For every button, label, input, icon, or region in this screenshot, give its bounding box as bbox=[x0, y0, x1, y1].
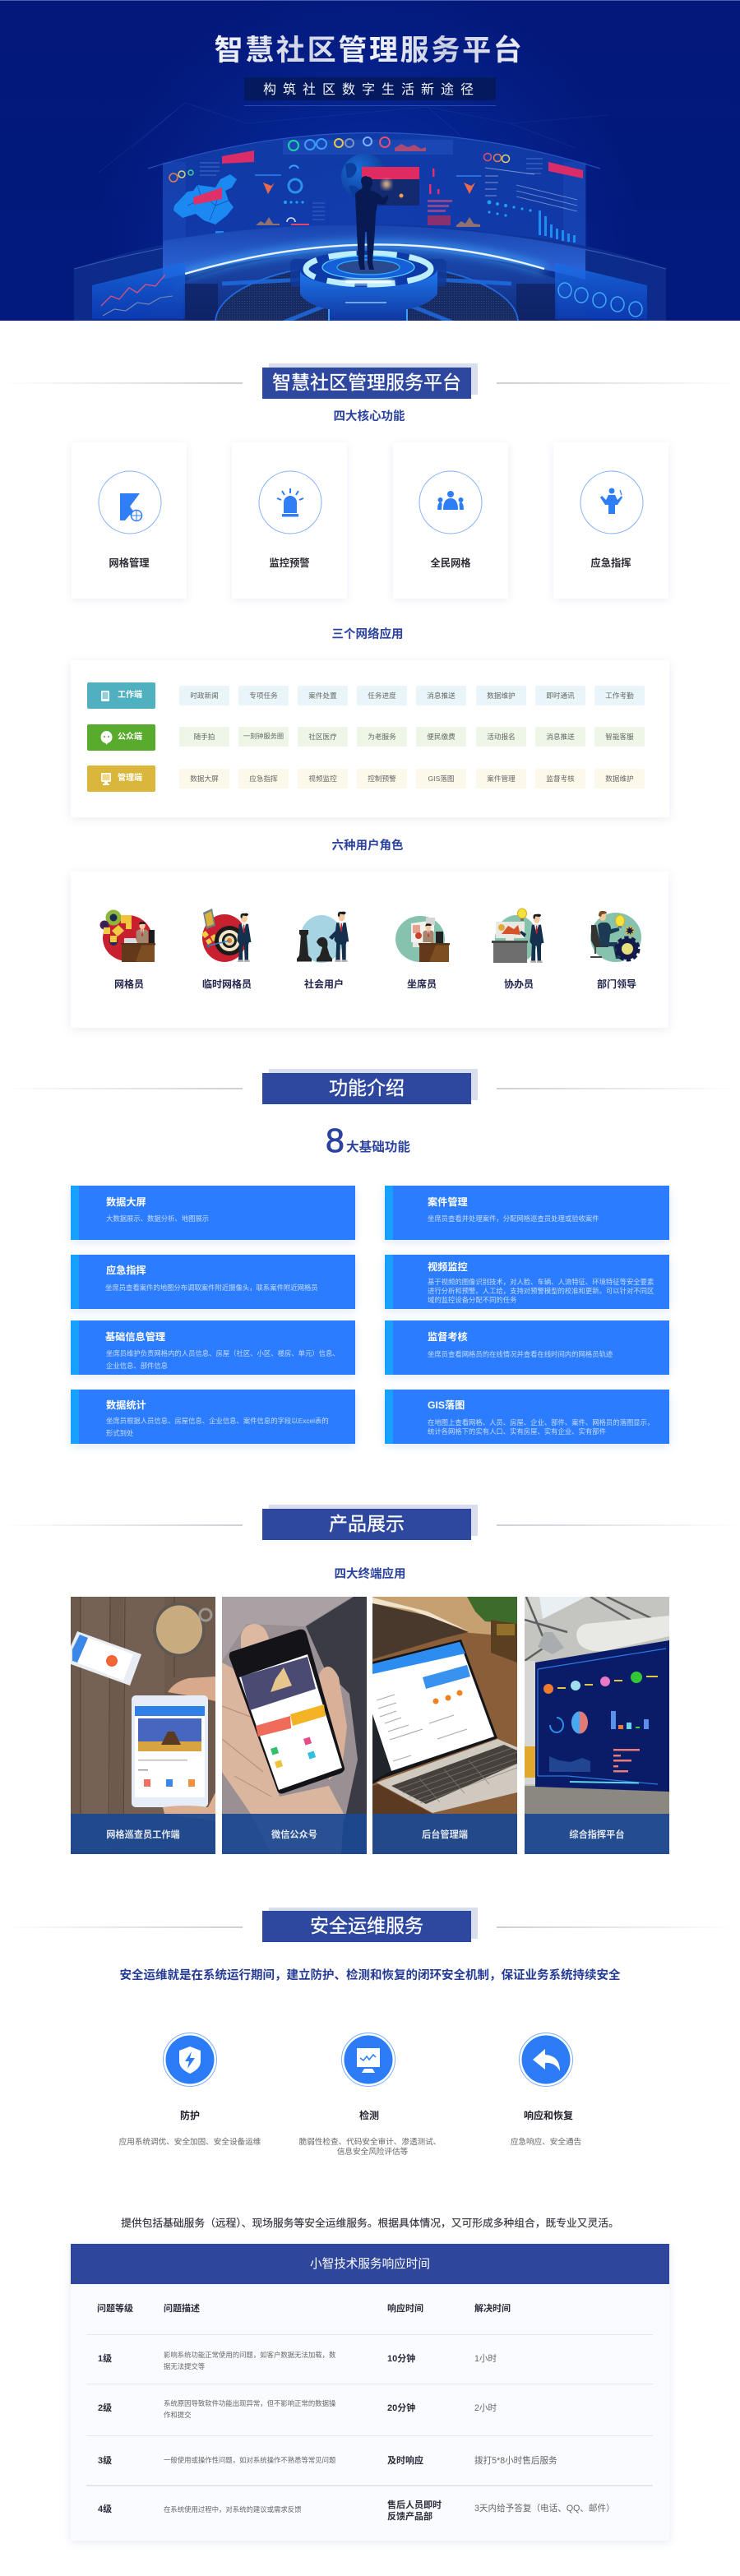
tags: 公众端 functions: 随手拍 bbox=[194, 733, 215, 741]
card: 全民网格 bbox=[393, 442, 508, 599]
table row: 2级: 20分钟 bbox=[387, 2403, 415, 2413]
role labels: 临时网格员 bbox=[202, 978, 252, 990]
table header bbox=[71, 2244, 669, 2284]
label: 防护: 防护 bbox=[180, 2110, 200, 2121]
tags: 公众端 functions: 便民缴费 bbox=[427, 733, 456, 741]
tags: 管理端 functions bbox=[179, 769, 645, 789]
heading shadow block: products bbox=[269, 1505, 478, 1536]
table row: 3级: 3级 bbox=[98, 2456, 112, 2466]
subheading: 四大核心功能: 四大核心功能 bbox=[334, 410, 405, 423]
hero banner bbox=[0, 0, 740, 321]
table row: 1级: 影响系统功能正常使用的问题，如客户数据无法加载，数 bbox=[164, 2351, 335, 2359]
label: 监控预警 bbox=[269, 557, 310, 569]
table row: 4级: 售后人员即时 bbox=[387, 2500, 442, 2510]
big number heading: 8大基础功能: 8 bbox=[326, 1122, 345, 1159]
pink alert tags bbox=[222, 150, 583, 178]
table row: 1级: 1级 bbox=[98, 2354, 112, 2364]
feature card: 数据统计 bbox=[71, 1390, 355, 1444]
description: 进行分析和预警。人工给，支持对预警模型的校准和更新。可以针对不同区 bbox=[428, 1287, 654, 1295]
section title: 产品展示 bbox=[262, 1509, 471, 1540]
title: 应急指挥 bbox=[106, 1265, 146, 1276]
tags: 公众端 functions: 消息推送 bbox=[546, 733, 575, 741]
tags: 工作端 functions: 数据维护 bbox=[487, 691, 516, 700]
heading shadow block: platform bbox=[269, 363, 478, 395]
table header: 小智技术服务响应时间 bbox=[310, 2258, 430, 2271]
title: 案件管理 bbox=[428, 1196, 468, 1208]
tags: 管理端 functions: 案件管理 bbox=[487, 775, 516, 783]
row label: 管理端 bbox=[87, 765, 155, 792]
section heading line right: products bbox=[497, 1524, 740, 1526]
product image: 后台管理端 bbox=[372, 1597, 517, 1854]
tags: 工作端 functions: 时政新闻 bbox=[190, 691, 219, 700]
label: 检测: 检测 bbox=[359, 2110, 379, 2121]
section heading line left: features bbox=[0, 1088, 243, 1089]
row label: 工作端 bbox=[87, 682, 155, 709]
right charts bbox=[428, 168, 577, 243]
feature card: 案件管理 bbox=[385, 1186, 669, 1240]
tags: 工作端 functions: 即时通讯 bbox=[546, 691, 575, 700]
section title: 智慧社区管理服务平台: 智慧社区管理服务平台 bbox=[272, 372, 461, 393]
section heading line right: features bbox=[497, 1088, 740, 1089]
description: 大数据展示、数据分析、地图展示 bbox=[106, 1214, 209, 1223]
section title: 安全运维服务 bbox=[262, 1911, 471, 1942]
description: 坐席员查看案件的地图分布调取案件附近摄像头，联系案件附近网格员 bbox=[105, 1283, 318, 1292]
icon: commander bbox=[580, 470, 643, 534]
feature card: GIS落图 bbox=[385, 1390, 669, 1444]
card: 网格管理 bbox=[72, 442, 187, 599]
mini gauges and text lines bbox=[169, 153, 543, 182]
tags: 公众端 functions: 智能客服 bbox=[605, 733, 634, 741]
label: 网格管理 bbox=[109, 557, 150, 569]
description: 统计各网格下的实有人口、实有房屋、实有企业、实有部件 bbox=[428, 1427, 606, 1436]
table row: 1级 bbox=[98, 2351, 497, 2370]
description: 检测: 脆弱性检查、代码安全审计、渗透测试、 bbox=[299, 2138, 441, 2147]
table panel: response time bbox=[71, 2244, 669, 2541]
table row: 4级: 3天内给予答复（电话、QQ、邮件） bbox=[474, 2504, 615, 2514]
intro statement: 安全运维就是在系统运行期间，建立防护、检测和恢复的闭环安全机制，保证业务系统持续安全 bbox=[120, 1969, 620, 1982]
subheading: 三个网络应用: 三个网络应用 bbox=[332, 628, 403, 641]
feature card: 监督考核 bbox=[385, 1320, 669, 1375]
label: 应急指挥 bbox=[590, 557, 631, 569]
title: 数据大屏 bbox=[106, 1196, 146, 1208]
row label: 管理端: 管理端 bbox=[118, 774, 142, 783]
product image: 网格巡查员工作端 bbox=[71, 1597, 215, 1854]
table row: 2级: 作和提交 bbox=[164, 2411, 191, 2419]
section title: 智慧社区管理服务平台 bbox=[262, 368, 471, 399]
tags: 公众端 functions: 一刻钟服务圈 bbox=[243, 733, 284, 740]
feature card: 数据大屏 bbox=[71, 1186, 355, 1240]
description: 坐席员维护负责网格内的人员信息、房屋（社区、小区、楼房、单元）信息、 bbox=[106, 1349, 340, 1357]
top gauges strip bbox=[283, 137, 453, 155]
subheading: 六种用户角色: 六种用户角色 bbox=[332, 839, 403, 853]
service statement: 提供包括基础服务（远程）、现场服务等安全运维服务。根据具体情况，又可形成多种组合，既专业又灵活。 bbox=[121, 2217, 619, 2229]
tags: 工作端 functions: 专项任务 bbox=[249, 691, 278, 700]
tags: 公众端 functions: 活动报名 bbox=[487, 733, 516, 741]
heading shadow block: security bbox=[269, 1908, 478, 1939]
table row: 2级: 系统原因导致软件功能出现异常，但不影响正常的数据操 bbox=[164, 2399, 335, 2407]
panel: six user roles bbox=[71, 872, 668, 1028]
description line 2: 检测: 信息安全风险评估等 bbox=[337, 2148, 408, 2157]
role illustration: 坐席员 bbox=[395, 916, 450, 962]
table row: 3级: 一般使用或操作性问题，如对系统操作不熟悉等常见问题 bbox=[164, 2456, 335, 2464]
bottom side panels bbox=[92, 262, 647, 319]
card: 应急指挥 bbox=[553, 442, 668, 599]
tags: 管理端 functions: GIS落图 bbox=[428, 775, 454, 783]
section title: 功能介绍: 功能介绍 bbox=[329, 1077, 405, 1098]
title: 数据统计 bbox=[106, 1399, 146, 1411]
role labels: 网格员 bbox=[114, 978, 144, 990]
title: 视频监控 bbox=[428, 1261, 468, 1273]
tags: 公众端 functions bbox=[179, 727, 645, 747]
title: 监督考核 bbox=[428, 1331, 468, 1343]
description: 基于视频的图像识别技术，对人脸、车辆、人流特征、环境特征等安全要素 bbox=[428, 1278, 654, 1286]
table row: 3级: 及时响应 bbox=[387, 2456, 423, 2466]
icon: people group bbox=[419, 470, 482, 534]
subheading: 四大终端应用: 四大终端应用 bbox=[334, 1568, 406, 1581]
title: 基础信息管理 bbox=[105, 1331, 165, 1343]
tags: 工作端 functions bbox=[179, 686, 645, 705]
tags: 管理端 functions: 数据大屏 bbox=[190, 775, 219, 783]
caption bbox=[525, 1814, 669, 1854]
description bbox=[106, 1417, 329, 1437]
panel: three network applications bbox=[71, 660, 669, 817]
description: 坐席员查看并处理案件，分配网格巡查员处理或验收案件 bbox=[428, 1214, 599, 1223]
table row: 2级: 2小时 bbox=[474, 2403, 497, 2413]
table row: 1级: 1小时 bbox=[474, 2354, 497, 2364]
table row: 2级: 2级 bbox=[98, 2403, 112, 2413]
description: 防护: 应用系统调优、安全加固、安全设备运维 bbox=[119, 2138, 261, 2147]
icon: reply response bbox=[519, 2033, 573, 2087]
description: 域的监控设备分配不同的任务 bbox=[428, 1296, 516, 1304]
tags: 管理端 functions: 应急指挥 bbox=[249, 775, 278, 783]
caption: 网格巡查员工作端 bbox=[106, 1830, 180, 1840]
section heading line left: products bbox=[0, 1524, 243, 1526]
card: 监控预警 bbox=[232, 442, 347, 599]
description bbox=[428, 1278, 654, 1304]
tags: 工作端 functions: 案件处置 bbox=[308, 691, 337, 700]
caption: 后台管理端 bbox=[422, 1830, 468, 1840]
tags: 工作端 functions: 任务进度 bbox=[368, 691, 396, 700]
icon: monitor bbox=[101, 773, 111, 785]
curved dashboard screen bbox=[148, 132, 600, 285]
icon: chat bubble bbox=[100, 731, 112, 745]
China map bbox=[173, 174, 237, 235]
description: 形式到处 bbox=[106, 1429, 133, 1437]
table row: 3级: 拨打5*8小时售后服务 bbox=[474, 2456, 557, 2466]
description: 在地图上查看网格、人员、房屋、企业、部件、案件、网格员的落图显示， bbox=[428, 1418, 654, 1427]
table column headers bbox=[97, 2304, 511, 2314]
description: 坐席员根据人员信息、房屋信息、企业信息、案件信息的字段以Excel表的 bbox=[106, 1417, 329, 1425]
section title: 功能介绍 bbox=[262, 1073, 471, 1104]
description bbox=[106, 1349, 340, 1370]
description: 响应和恢复: 应急响应、安全通告 bbox=[511, 2138, 581, 2147]
role illustration: 部门领导 bbox=[590, 911, 641, 962]
label: 全民网格 bbox=[430, 557, 471, 569]
icon: phone bbox=[101, 691, 109, 701]
holographic platform bbox=[74, 225, 666, 382]
section heading line left: platform bbox=[0, 382, 243, 384]
tags: 工作端 functions: 工作考勤 bbox=[605, 691, 634, 700]
icon: shield protection bbox=[163, 2033, 217, 2087]
heading shadow block: features bbox=[269, 1069, 478, 1100]
product image: 微信公众号 bbox=[222, 1597, 367, 1854]
title: GIS落图 bbox=[428, 1399, 465, 1411]
table row: 4级: 在系统使用过程中，对系统的建议或需求反馈 bbox=[164, 2505, 301, 2514]
caption: 微信公众号 bbox=[271, 1830, 317, 1840]
tags: 管理端 functions: 数据维护 bbox=[605, 775, 634, 783]
section heading line left: security bbox=[0, 1926, 243, 1928]
feature card: 视频监控 bbox=[385, 1255, 669, 1309]
tags: 公众端 functions: 为老服务 bbox=[368, 733, 396, 741]
tags: 工作端 functions: 消息推送 bbox=[427, 691, 456, 700]
row label: 公众端: 公众端 bbox=[118, 733, 142, 742]
table row: 3级 bbox=[98, 2455, 557, 2466]
row label: 工作端: 工作端 bbox=[118, 691, 142, 700]
tags: 公众端 functions: 社区医疗 bbox=[308, 733, 337, 741]
role labels: 社会用户 bbox=[304, 978, 344, 990]
illustrations: six user roles bbox=[100, 908, 641, 963]
section title: 安全运维服务: 安全运维服务 bbox=[310, 1915, 423, 1936]
hero subtitle bbox=[244, 77, 496, 106]
caption bbox=[71, 1814, 215, 1854]
section title: 产品展示: 产品展示 bbox=[329, 1513, 405, 1534]
table row: 4级: 反馈产品部 bbox=[387, 2512, 432, 2522]
table column headers: 响应时间 bbox=[387, 2304, 423, 2314]
row label: 公众端 bbox=[87, 724, 155, 751]
middle charts bbox=[255, 165, 325, 225]
tags: 管理端 functions: 控制预警 bbox=[368, 775, 396, 783]
tags: 管理端 functions: 监督考核 bbox=[546, 775, 575, 783]
table column headers: 问题等级 bbox=[97, 2304, 133, 2314]
feature card: 基础信息管理 bbox=[71, 1320, 355, 1375]
section heading line right: platform bbox=[497, 382, 740, 384]
role illustration: 社会用户 bbox=[297, 912, 349, 963]
table column headers: 解决时间 bbox=[474, 2304, 511, 2314]
tags: 管理端 functions: 视频监控 bbox=[308, 775, 337, 783]
hero subtitle: 构筑社区数字生活新途径 bbox=[263, 82, 480, 97]
caption bbox=[222, 1814, 367, 1854]
big number heading: 8大基础功能 bbox=[326, 1122, 410, 1159]
person silhouette bbox=[355, 176, 389, 270]
role labels: 协办员 bbox=[504, 978, 534, 990]
table row: 1级: 10分钟 bbox=[387, 2354, 415, 2364]
globe and alert window bbox=[341, 154, 419, 206]
label: 响应和恢复: 响应和恢复 bbox=[524, 2110, 573, 2121]
description: 坐席员查看网格员的在线情况并查看在线时间内的网格员轨迹 bbox=[428, 1350, 613, 1358]
table row: 4级 bbox=[98, 2500, 615, 2522]
icon: network grid globe bbox=[99, 470, 161, 534]
role illustration: 协办员 bbox=[492, 909, 543, 963]
table row: 1级: 据无法提交等 bbox=[164, 2361, 205, 2370]
table row: 4级: 4级 bbox=[98, 2504, 112, 2514]
role illustration: 网格员 bbox=[101, 912, 155, 962]
product image: 综合指挥平台 bbox=[525, 1597, 669, 1854]
big number heading: 8大基础功能: 大基础功能 bbox=[346, 1140, 410, 1154]
table column headers: 问题描述 bbox=[164, 2304, 200, 2314]
section heading line right: security bbox=[497, 1926, 740, 1928]
feature card: 应急指挥 bbox=[71, 1255, 355, 1309]
caption bbox=[372, 1814, 517, 1854]
description bbox=[428, 1418, 654, 1436]
caption: 综合指挥平台 bbox=[569, 1830, 625, 1840]
role illustration: 临时网格员 bbox=[201, 909, 251, 962]
table row: 2级 bbox=[98, 2399, 497, 2419]
role labels: 部门领导 bbox=[597, 978, 636, 990]
description: 企业信息、部件信息 bbox=[106, 1362, 168, 1370]
role labels: 坐席员 bbox=[407, 978, 437, 990]
icon: monitor detection bbox=[341, 2033, 395, 2087]
role labels bbox=[114, 978, 636, 990]
hero title: 智慧社区管理服务平台 bbox=[214, 35, 525, 67]
icon: alarm siren bbox=[258, 470, 322, 534]
